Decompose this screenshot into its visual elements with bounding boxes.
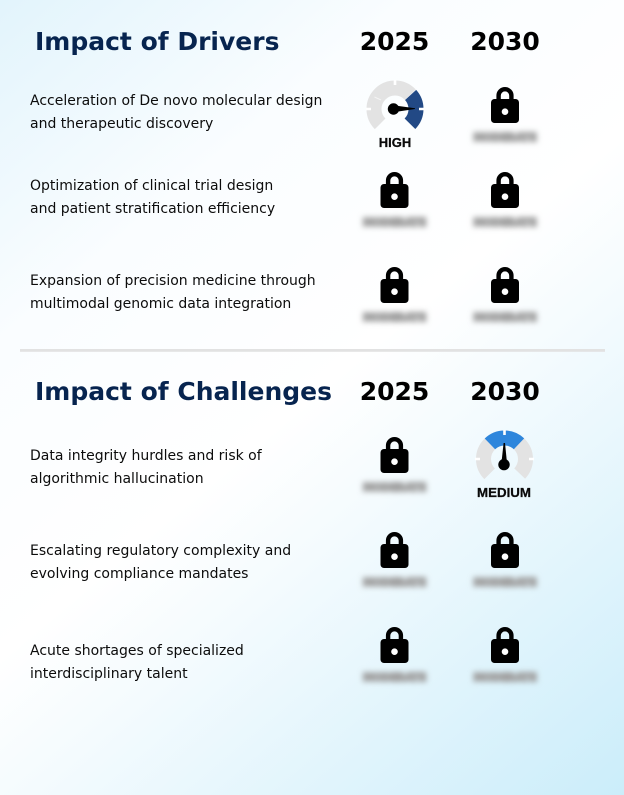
locked rating: challenge 2, 2025: MODERATE	[363, 578, 426, 589]
gauge: high, drivers 2025: HIGH	[379, 135, 411, 150]
locked rating: challenge 2, 2025	[363, 534, 426, 589]
locked rating: challenge 3, 2030	[473, 629, 537, 684]
year heading: challenges 2025: 2025	[360, 377, 429, 406]
locked rating: driver 1, 2030: MODERATE	[473, 133, 537, 144]
locked rating: driver 1, 2030	[473, 89, 537, 144]
year heading: drivers 2025: 2025	[360, 27, 429, 56]
locked rating: driver 2, 2025	[363, 174, 426, 229]
heading: Impact of Drivers: Impact of Drivers	[35, 27, 279, 56]
driver 2 text: and patient stratification efficiency	[30, 201, 275, 217]
challenge 1 text: Data integrity hurdles and risk of	[30, 448, 262, 464]
locked rating: challenge 1, 2025: MODERATE	[363, 483, 426, 494]
locked rating: challenge 3, 2025	[363, 629, 426, 684]
challenge 3 text: Acute shortages of specialized	[30, 643, 244, 659]
gauge: medium, challenges 2030	[475, 429, 534, 500]
driver 3 text: Expansion of precision medicine through	[30, 273, 316, 289]
locked rating: challenge 3, 2025: MODERATE	[363, 673, 426, 684]
challenge 2 text: Escalating regulatory complexity and	[30, 543, 291, 559]
locked rating: challenge 1, 2025	[363, 439, 426, 494]
challenge 3 text: interdisciplinary talent	[30, 666, 188, 682]
year heading: challenges 2030: 2030	[470, 377, 540, 406]
driver 1 text: and therapeutic discovery	[30, 116, 213, 132]
locked rating: driver 2, 2025: MODERATE	[363, 218, 426, 229]
locked rating: driver 3, 2030	[473, 269, 537, 324]
year heading: drivers 2030: 2030	[470, 27, 540, 56]
locked rating: driver 3, 2030: MODERATE	[473, 313, 537, 324]
driver 2 text: Optimization of clinical trial design	[30, 178, 273, 194]
challenge 2 text: evolving compliance mandates	[30, 566, 248, 582]
locked rating: challenge 3, 2030: MODERATE	[473, 673, 537, 684]
heading: Impact of Challenges: Impact of Challenges	[35, 377, 332, 406]
challenge 1 text: algorithmic hallucination	[30, 471, 204, 487]
locked rating: driver 3, 2025: MODERATE	[363, 313, 426, 324]
locked rating: challenge 2, 2030: MODERATE	[473, 578, 537, 589]
gauge: medium, challenges 2030: MEDIUM	[477, 485, 531, 500]
driver 1 text: Acceleration of De novo molecular design	[30, 93, 322, 109]
gauge: high, drivers 2025	[365, 79, 425, 150]
locked rating: challenge 2, 2030	[473, 534, 537, 589]
driver 3 text: multimodal genomic data integration	[30, 296, 291, 312]
locked rating: driver 2, 2030	[473, 174, 537, 229]
locked rating: driver 3, 2025	[363, 269, 426, 324]
locked rating: driver 2, 2030: MODERATE	[473, 218, 537, 229]
